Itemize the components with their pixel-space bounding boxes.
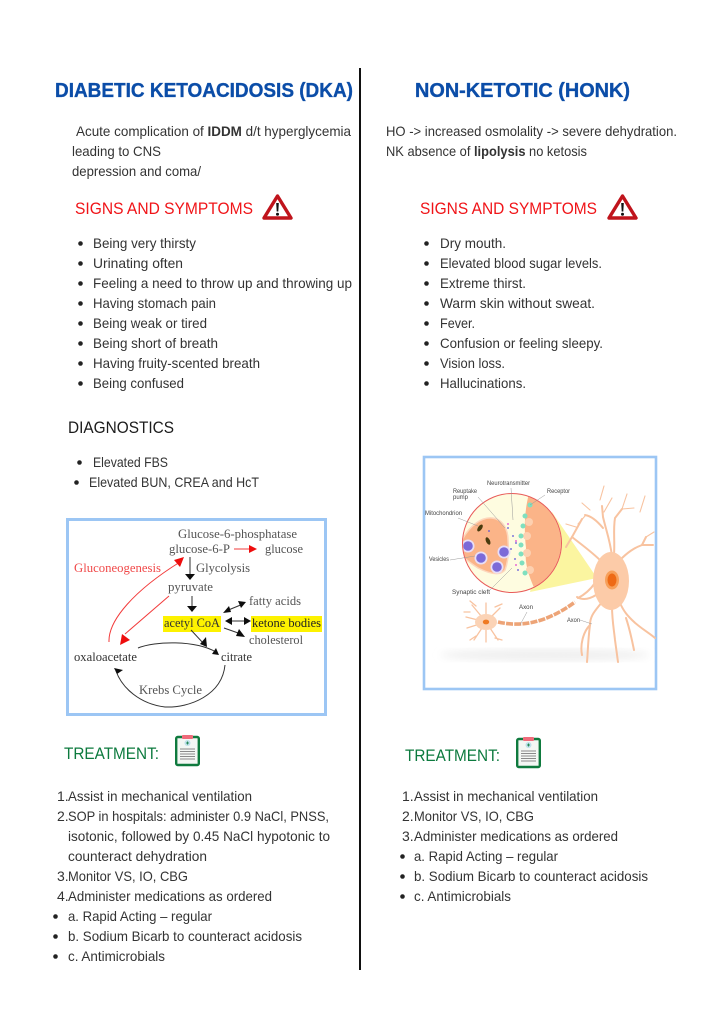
list: DKA treatment steps: counteract dehydration bbox=[68, 848, 207, 864]
chart: metabolic pathway diagram: Glucose-6-phosphatase bbox=[178, 527, 297, 541]
list: DKA treatment steps: a. Rapid Acting – regular bbox=[68, 908, 212, 924]
list: HONK symptoms: Confusion or feeling sleepy. bbox=[440, 335, 603, 351]
text block: DKA intro: depression and coma/ bbox=[72, 163, 201, 179]
column divider bbox=[359, 68, 361, 970]
list: HONK treatment steps: 1. bbox=[402, 788, 414, 804]
chart: metabolic pathway diagram: fatty acids bbox=[249, 594, 301, 608]
heading: HONK treatment: TREATMENT: bbox=[405, 747, 500, 765]
list: HONK treatment steps bbox=[400, 788, 648, 904]
chart: metabolic pathway diagram: glucose-6-P bbox=[169, 542, 230, 556]
text block: DKA intro: leading to CNS bbox=[72, 143, 161, 159]
list: DKA symptoms: Being short of breath bbox=[93, 335, 218, 351]
chart: metabolic pathway diagram: Gluconeogenesis bbox=[74, 561, 161, 575]
list: DKA treatment steps: c. Antimicrobials bbox=[68, 948, 165, 964]
chart: metabolic pathway diagram: pyruvate bbox=[168, 580, 213, 594]
text block: HONK intro: HO -> increased osmolality -> severe dehydration. bbox=[386, 123, 677, 139]
list: HONK symptoms bbox=[424, 235, 603, 391]
icon: HONK clipboard bbox=[517, 737, 540, 767]
text block: HONK intro bbox=[386, 123, 677, 159]
list: DKA symptoms: Having fruity-scented breath bbox=[93, 355, 260, 371]
chart: metabolic pathway diagram: Glycolysis bbox=[196, 561, 250, 575]
list: HONK symptoms: Elevated blood sugar levels. bbox=[440, 255, 602, 271]
list: DKA symptoms bbox=[78, 235, 352, 391]
icon: HONK warning triangle bbox=[609, 196, 636, 218]
neuron labels bbox=[425, 481, 580, 624]
list: HONK treatment steps: a. Rapid Acting – regular bbox=[414, 848, 558, 864]
list: HONK treatment steps: Assist in mechanical ventilation bbox=[414, 788, 598, 804]
neuron labels: pump bbox=[453, 495, 469, 501]
list: HONK symptoms: Warm skin without sweat. bbox=[440, 295, 595, 311]
list: HONK treatment steps: 2. bbox=[402, 808, 414, 824]
title: HONK: NON-KETOTIC (HONK) bbox=[415, 80, 630, 102]
chart: metabolic pathway diagram: cholesterol bbox=[249, 633, 304, 647]
list: DKA treatment steps: Monitor VS, IO, CBG bbox=[68, 868, 188, 884]
icon: DKA clipboard bbox=[176, 735, 199, 765]
heading: HONK signs and symptoms: SIGNS AND SYMPTOMS bbox=[420, 200, 597, 218]
neuron body bbox=[593, 552, 629, 610]
neuron labels: Reuptake bbox=[453, 489, 478, 495]
text block: DKA intro: Acute complication of IDDM d/t hyperglycemia bbox=[76, 123, 351, 139]
small neuron bbox=[464, 601, 502, 642]
list: DKA treatment steps: Assist in mechanical ventilation bbox=[68, 788, 252, 804]
list: DKA treatment steps bbox=[53, 788, 330, 964]
text block: HONK intro: NK absence of lipolysis no ketosis bbox=[386, 143, 587, 159]
neuron dendrites bbox=[566, 486, 655, 662]
list: HONK symptoms: Hallucinations. bbox=[440, 375, 526, 391]
list: DKA symptoms: Being confused bbox=[93, 375, 184, 391]
chart: metabolic pathway diagram bbox=[68, 520, 326, 714]
chart: metabolic pathway diagram: glucose bbox=[265, 542, 303, 556]
chart: metabolic pathway diagram: oxaloacetate bbox=[74, 650, 137, 664]
neuron labels: Neurotransmitter bbox=[487, 481, 530, 487]
list: HONK treatment steps: 3. bbox=[402, 828, 414, 844]
panel: HONK column bbox=[386, 80, 677, 904]
chart: neuron and synapse illustration bbox=[424, 457, 656, 689]
neuron labels: Mitochondrion bbox=[425, 511, 462, 517]
axon bbox=[498, 602, 575, 624]
list: HONK symptoms: Dry mouth. bbox=[440, 235, 506, 251]
heading: DKA treatment: TREATMENT: bbox=[64, 745, 159, 763]
heading: DKA signs and symptoms: SIGNS AND SYMPTOMS bbox=[75, 200, 253, 218]
chart: metabolic pathway diagram: ketone bodies bbox=[252, 616, 321, 630]
list: DKA treatment steps: Administer medications as ordered bbox=[68, 888, 272, 904]
list: HONK symptoms: Vision loss. bbox=[440, 355, 505, 371]
black arrows bbox=[116, 557, 247, 707]
list: DKA symptoms: Having stomach pain bbox=[93, 295, 216, 311]
list: DKA treatment steps: 3. bbox=[57, 868, 69, 884]
list: HONK treatment steps: c. Antimicrobials bbox=[414, 888, 511, 904]
neuron labels: Vesicles bbox=[429, 557, 449, 563]
heading: diagnostics: DIAGNOSTICS bbox=[68, 419, 174, 437]
neuron labels: Synaptic cleft bbox=[452, 590, 490, 596]
list: DKA symptoms: Being weak or tired bbox=[93, 315, 207, 331]
yellow zoom cone bbox=[530, 512, 597, 592]
icon: DKA warning triangle bbox=[264, 196, 291, 218]
neuron labels: Axon bbox=[519, 605, 533, 611]
red arrows bbox=[109, 549, 252, 642]
chart: metabolic pathway diagram: acetyl CoA bbox=[164, 616, 220, 630]
list: DKA treatment steps: 2. bbox=[57, 808, 69, 824]
panel: DKA column bbox=[53, 80, 353, 964]
list: DKA treatment steps: isotonic, followed by 0.45 NaCl hypotonic to bbox=[68, 828, 330, 844]
neuron labels: Axon bbox=[567, 618, 580, 624]
list: DKA symptoms: Urinating often bbox=[93, 255, 183, 271]
list: DKA symptoms: Feeling a need to throw up and throwing up bbox=[93, 275, 352, 291]
title: DKA: DIABETIC KETOACIDOSIS (DKA) bbox=[55, 80, 353, 102]
list: DKA treatment steps: SOP in hospitals: administer 0.9 NaCl, PNSS, bbox=[68, 808, 329, 824]
list: diagnostics bbox=[74, 454, 259, 490]
list: DKA symptoms: Being very thirsty bbox=[93, 235, 196, 251]
list: HONK symptoms: Fever. bbox=[440, 315, 475, 331]
list: HONK treatment steps: b. Sodium Bicarb to counteract acidosis bbox=[414, 868, 648, 884]
list: HONK treatment steps: Monitor VS, IO, CBG bbox=[414, 808, 534, 824]
list: HONK symptoms: Extreme thirst. bbox=[440, 275, 526, 291]
synapse magnifier circle bbox=[462, 493, 562, 593]
list: diagnostics: Elevated FBS bbox=[93, 454, 168, 470]
neuron labels: Receptor bbox=[547, 489, 570, 495]
list: HONK treatment steps: Administer medications as ordered bbox=[414, 828, 618, 844]
text block: DKA intro bbox=[72, 123, 351, 179]
list: DKA treatment steps: 1. bbox=[57, 788, 69, 804]
list: DKA treatment steps: 4. bbox=[57, 888, 69, 904]
chart: metabolic pathway diagram: citrate bbox=[221, 650, 252, 664]
list: diagnostics: Elevated BUN, CREA and HcT bbox=[89, 474, 259, 490]
list: DKA treatment steps: b. Sodium Bicarb to counteract acidosis bbox=[68, 928, 302, 944]
chart: metabolic pathway diagram: Krebs Cycle bbox=[139, 683, 202, 697]
ground shadow bbox=[440, 649, 650, 661]
